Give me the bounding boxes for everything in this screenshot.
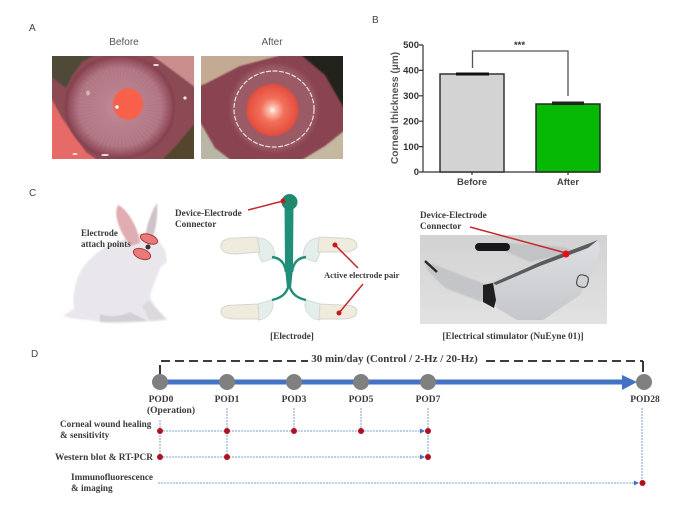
y axis with ticks and labels: 500 [403,40,419,51]
timeline arrow [160,375,637,390]
panel A: eye photographs [29,23,345,162]
POD labels: POD28 [630,395,660,405]
POD labels: (Operation) [147,405,195,416]
panel letter C: C [29,188,36,199]
row label: Immunofluorescence [71,472,153,482]
caption: electrical stimulator: [Electrical stimulator (NuEyne 01)] [442,331,584,342]
treatment duration dashed bracket [160,361,643,374]
treatment duration label: 30 min/day (Control / 2-Hz / 20-Hz) [311,353,478,365]
y axis with ticks and labels: 200 [403,116,419,128]
label: device-electrode connector: Connector [175,219,216,229]
x label: Before: Before [457,177,487,188]
label: electrode attach points: attach points [81,239,131,249]
illustration: rabbit with attach points [63,203,168,323]
y axis with ticks and labels: 0 [414,167,419,178]
photo: eye before [50,54,196,162]
attach point upper [139,232,159,246]
heading: After: After [261,37,283,48]
row: immunofluorescence and imaging [71,472,646,493]
timeline nodes [152,374,652,390]
panel letter A: A [29,23,36,34]
active electrode pointers [335,245,363,313]
significance stars: *** [514,40,525,51]
heading: Before: Before [109,37,139,48]
row line [160,428,425,434]
row: corneal wound healing and sensitivity [60,419,431,440]
photo: electrical stimulator glasses [420,210,607,342]
row label: & imaging [71,483,113,493]
label: device-electrode connector: Connector [420,221,461,231]
x label: After: After [557,177,579,188]
row label: Western blot & RT-PCR [55,453,153,463]
bar: Before [440,72,504,172]
label: active electrode pair: Active electrode pair [324,270,400,280]
POD labels [147,395,660,416]
y axis with ticks and labels: 100 [403,142,419,153]
POD labels: POD1 [215,395,240,405]
row line [160,454,425,460]
POD labels: POD0 [149,395,174,405]
significance bracket [472,51,568,96]
panel C: electrode and stimulator setup [29,188,607,342]
row marker [640,480,646,486]
dashed incision ring [234,71,314,147]
y axis with ticks and labels: 300 [403,91,419,102]
y axis with ticks and labels: 400 [403,66,419,76]
y axis title: Corneal thickness (µm) [390,52,401,164]
vertical guide lines [160,408,642,483]
row: western blot and RT-PCR [55,453,431,463]
row label: Corneal wound healing [60,419,152,429]
POD labels: POD5 [349,395,374,405]
row line [158,480,639,486]
panel letter B: B [372,15,379,26]
photo: eye after [199,54,345,161]
caption: electrode: [Electrode] [270,331,314,341]
illustration: electrode [175,194,400,341]
row label: & sensitivity [60,430,110,440]
bar: After [536,102,600,172]
label: electrode attach points: Electrode [81,228,118,238]
label: device-electrode connector: Device-Electrode [420,210,487,220]
attach point lower [132,246,152,262]
label: device-electrode connector: Device-Electrode [175,208,242,218]
POD labels: POD3 [282,395,307,405]
connector pointer on glasses [470,227,566,253]
panel D: study timeline [31,349,660,493]
POD labels: POD7 [416,395,441,405]
row markers [157,428,431,434]
connector pointer [248,201,283,210]
y axis with ticks and labels [403,40,600,178]
panel letter D: D [31,349,38,360]
row markers [157,454,431,460]
panel B: bar chart of corneal thickness [372,15,600,188]
